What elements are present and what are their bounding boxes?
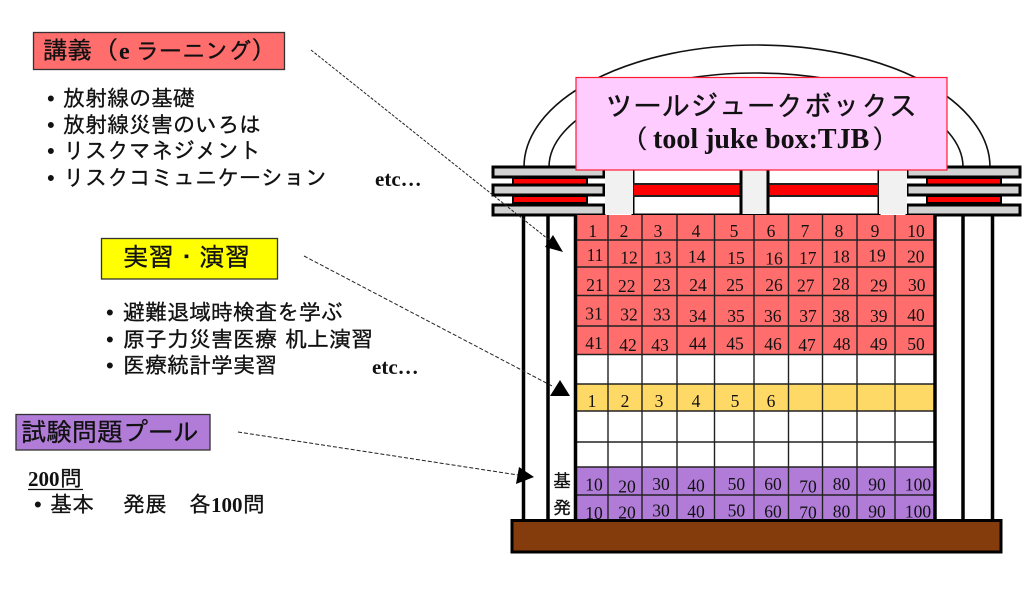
basic and advanced row labels: 基 — [553, 472, 571, 490]
list: practice topics: • — [106, 327, 114, 352]
e-learning slots 1 to 50: 48 — [833, 334, 851, 354]
e-learning slots 1 to 50: 30 — [908, 275, 926, 295]
grid fills — [577, 215, 934, 519]
e-learning slots 1 to 50: 7 — [801, 221, 810, 241]
title box — [576, 78, 947, 170]
e-learning slots 1 to 50: 45 — [726, 334, 744, 354]
list: e-learning topics: etc… — [375, 167, 422, 191]
e-learning slots 1 to 50: 9 — [871, 221, 880, 241]
pillars — [524, 215, 992, 520]
list: e-learning topics — [47, 86, 422, 191]
practice slots 1 to 6: 6 — [767, 391, 776, 411]
e-learning slots 1 to 50: 42 — [619, 335, 637, 355]
basic and advanced row labels: 発 — [553, 499, 571, 517]
exam pool details: 200 — [28, 467, 60, 491]
e-learning slots 1 to 50: 40 — [907, 305, 925, 325]
exam pool slots: 50 — [728, 474, 745, 494]
list: e-learning topics: • — [47, 112, 55, 138]
exam pool slots: 50 — [728, 501, 745, 521]
arrow: practice to slots — [304, 256, 570, 396]
e-learning slots 1 to 50: 20 — [907, 247, 925, 267]
e-learning slots 1 to 50: 34 — [689, 306, 707, 326]
exam pool slots: 30 — [652, 501, 670, 521]
e-learning slots 1 to 50: 12 — [620, 248, 638, 268]
e-learning slots 1 to 50: 10 — [907, 221, 925, 241]
e-learning slots 1 to 50: 37 — [799, 306, 817, 326]
list: e-learning topics: 放射線災害のいろは — [63, 114, 261, 136]
list: practice topics: 原子力災害医療 — [123, 328, 277, 350]
grid lines — [577, 215, 934, 519]
e-learning slots 1 to 50: 16 — [765, 249, 783, 269]
practice slots 1 to 6 — [588, 391, 776, 411]
heading: e-learning — [34, 32, 284, 70]
exam pool slots: 90 — [868, 475, 886, 495]
heading: e-learning: （ — [94, 37, 118, 62]
e-learning slots 1 to 50: 36 — [764, 306, 782, 326]
e-learning slots 1 to 50: 11 — [587, 245, 603, 265]
e-learning slots 1 to 50: 27 — [797, 276, 815, 296]
exam pool details: 発展 — [123, 493, 167, 515]
e-learning slots 1 to 50: 24 — [689, 275, 707, 295]
basic and advanced row labels — [553, 472, 571, 517]
exam pool details: • — [34, 492, 42, 517]
e-learning slots 1 to 50: 8 — [835, 221, 844, 241]
heading: exam question pool: 試験問題プール — [21, 419, 199, 445]
exam pool slots: 70 — [799, 477, 817, 497]
e-learning slots 1 to 50: 31 — [585, 304, 603, 324]
e-learning slots 1 to 50: 39 — [870, 306, 888, 326]
exam pool details: 基本 — [50, 493, 94, 515]
dome arcs — [524, 45, 990, 167]
e-learning slots 1 to 50 — [585, 221, 926, 355]
exam pool slots: 90 — [868, 501, 886, 521]
exam pool slots: 100 — [905, 475, 931, 495]
e-learning slots 1 to 50: 38 — [832, 306, 850, 326]
exam pool slots: 100 — [905, 501, 931, 521]
list: practice topics: • — [106, 300, 114, 325]
list: practice topics — [106, 300, 419, 379]
e-learning slots 1 to 50: 25 — [726, 275, 744, 295]
title box: tool juke box:TJB — [653, 124, 869, 155]
list: e-learning topics: • — [47, 86, 55, 111]
e-learning slots 1 to 50: 41 — [585, 333, 603, 353]
list: practice topics: 避難退域時検査を学ぶ — [123, 301, 343, 323]
exam pool slots: 40 — [687, 501, 705, 521]
list: practice topics: 机上演習 — [285, 328, 373, 350]
heading: e-learning: ラーニング — [136, 39, 251, 62]
wooden base — [512, 520, 1001, 552]
list: e-learning topics: • — [47, 138, 55, 164]
exam pool slots: 20 — [618, 477, 636, 497]
e-learning slots 1 to 50: 44 — [689, 334, 707, 354]
list: practice topics: • — [106, 353, 114, 378]
arrow: exam pool to slots — [238, 432, 534, 484]
practice slots 1 to 6: 5 — [731, 391, 740, 411]
e-learning slots 1 to 50: 49 — [870, 334, 888, 354]
list: e-learning topics: 放射線の基礎 — [63, 87, 195, 109]
exam pool slots — [585, 474, 931, 523]
title box: （ — [622, 126, 648, 152]
e-learning slots 1 to 50: 32 — [620, 304, 638, 324]
e-learning slots 1 to 50: 28 — [832, 274, 850, 294]
list: practice topics: etc… — [372, 355, 419, 379]
practice slots 1 to 6: 2 — [621, 391, 629, 411]
exam pool details: 問 — [243, 493, 265, 515]
exam pool slots: 80 — [833, 501, 850, 521]
list: e-learning topics: リスクコミュニケーション — [63, 166, 327, 188]
e-learning slots 1 to 50: 5 — [730, 221, 739, 241]
e-learning slots 1 to 50: 26 — [765, 275, 783, 295]
e-learning slots 1 to 50: 4 — [692, 221, 701, 241]
e-learning slots 1 to 50: 22 — [618, 276, 635, 296]
exam pool slots: 10 — [585, 475, 603, 495]
e-learning slots 1 to 50: 14 — [688, 247, 706, 267]
exam pool slots: 60 — [764, 501, 782, 521]
e-learning slots 1 to 50: 3 — [654, 221, 663, 241]
e-learning slots 1 to 50: 17 — [799, 248, 817, 268]
e-learning slots 1 to 50: 43 — [651, 335, 669, 355]
heading: e-learning: e — [119, 39, 130, 65]
list: e-learning topics: リスクマネジメント — [63, 140, 261, 162]
heading: practice: 実習・演習 — [123, 244, 250, 270]
heading: practice — [102, 238, 278, 279]
practice slots 1 to 6: 4 — [692, 391, 701, 411]
list: e-learning topics: • — [47, 166, 55, 190]
exam pool slots: 80 — [833, 474, 850, 494]
title box: ツールジュークボックス — [605, 92, 917, 120]
e-learning slots 1 to 50: 19 — [868, 246, 886, 266]
e-learning slots 1 to 50: 46 — [764, 334, 782, 354]
exam pool slots: 10 — [585, 503, 603, 523]
e-learning slots 1 to 50: 47 — [798, 335, 816, 355]
arrow: e-learning to slots — [311, 50, 563, 252]
heading: e-learning: ） — [251, 37, 276, 62]
e-learning slots 1 to 50: 21 — [586, 275, 604, 295]
exam pool slots: 60 — [764, 474, 782, 494]
exam pool details: 問 — [60, 467, 82, 489]
exam pool slots: 70 — [799, 502, 817, 522]
practice slots 1 to 6: 1 — [588, 391, 596, 411]
e-learning slots 1 to 50: 50 — [907, 334, 925, 354]
exam pool slots: 30 — [652, 474, 670, 494]
heading: e-learning: 講義 — [43, 37, 92, 62]
title box: ） — [872, 126, 898, 152]
e-learning slots 1 to 50: 29 — [870, 276, 888, 296]
grid outer rails — [576, 214, 935, 520]
e-learning slots 1 to 50: 2 — [620, 221, 628, 241]
beam structure — [493, 167, 1020, 215]
e-learning slots 1 to 50: 15 — [727, 248, 745, 268]
exam pool slots: 40 — [687, 476, 705, 496]
e-learning slots 1 to 50: 35 — [727, 306, 745, 326]
list: practice topics: 医療統計学実習 — [123, 354, 277, 376]
e-learning slots 1 to 50: 6 — [767, 221, 776, 241]
exam pool slots: 20 — [618, 502, 636, 522]
heading: exam question pool — [16, 414, 210, 450]
e-learning slots 1 to 50: 1 — [588, 221, 597, 241]
e-learning slots 1 to 50: 23 — [653, 275, 671, 295]
exam pool details — [28, 467, 265, 517]
practice slots 1 to 6: 3 — [655, 391, 664, 411]
e-learning slots 1 to 50: 13 — [654, 248, 672, 268]
e-learning slots 1 to 50: 33 — [653, 304, 671, 324]
exam pool details: 100 — [211, 493, 242, 517]
exam pool details: 各 — [189, 493, 211, 515]
e-learning slots 1 to 50: 18 — [832, 247, 850, 267]
